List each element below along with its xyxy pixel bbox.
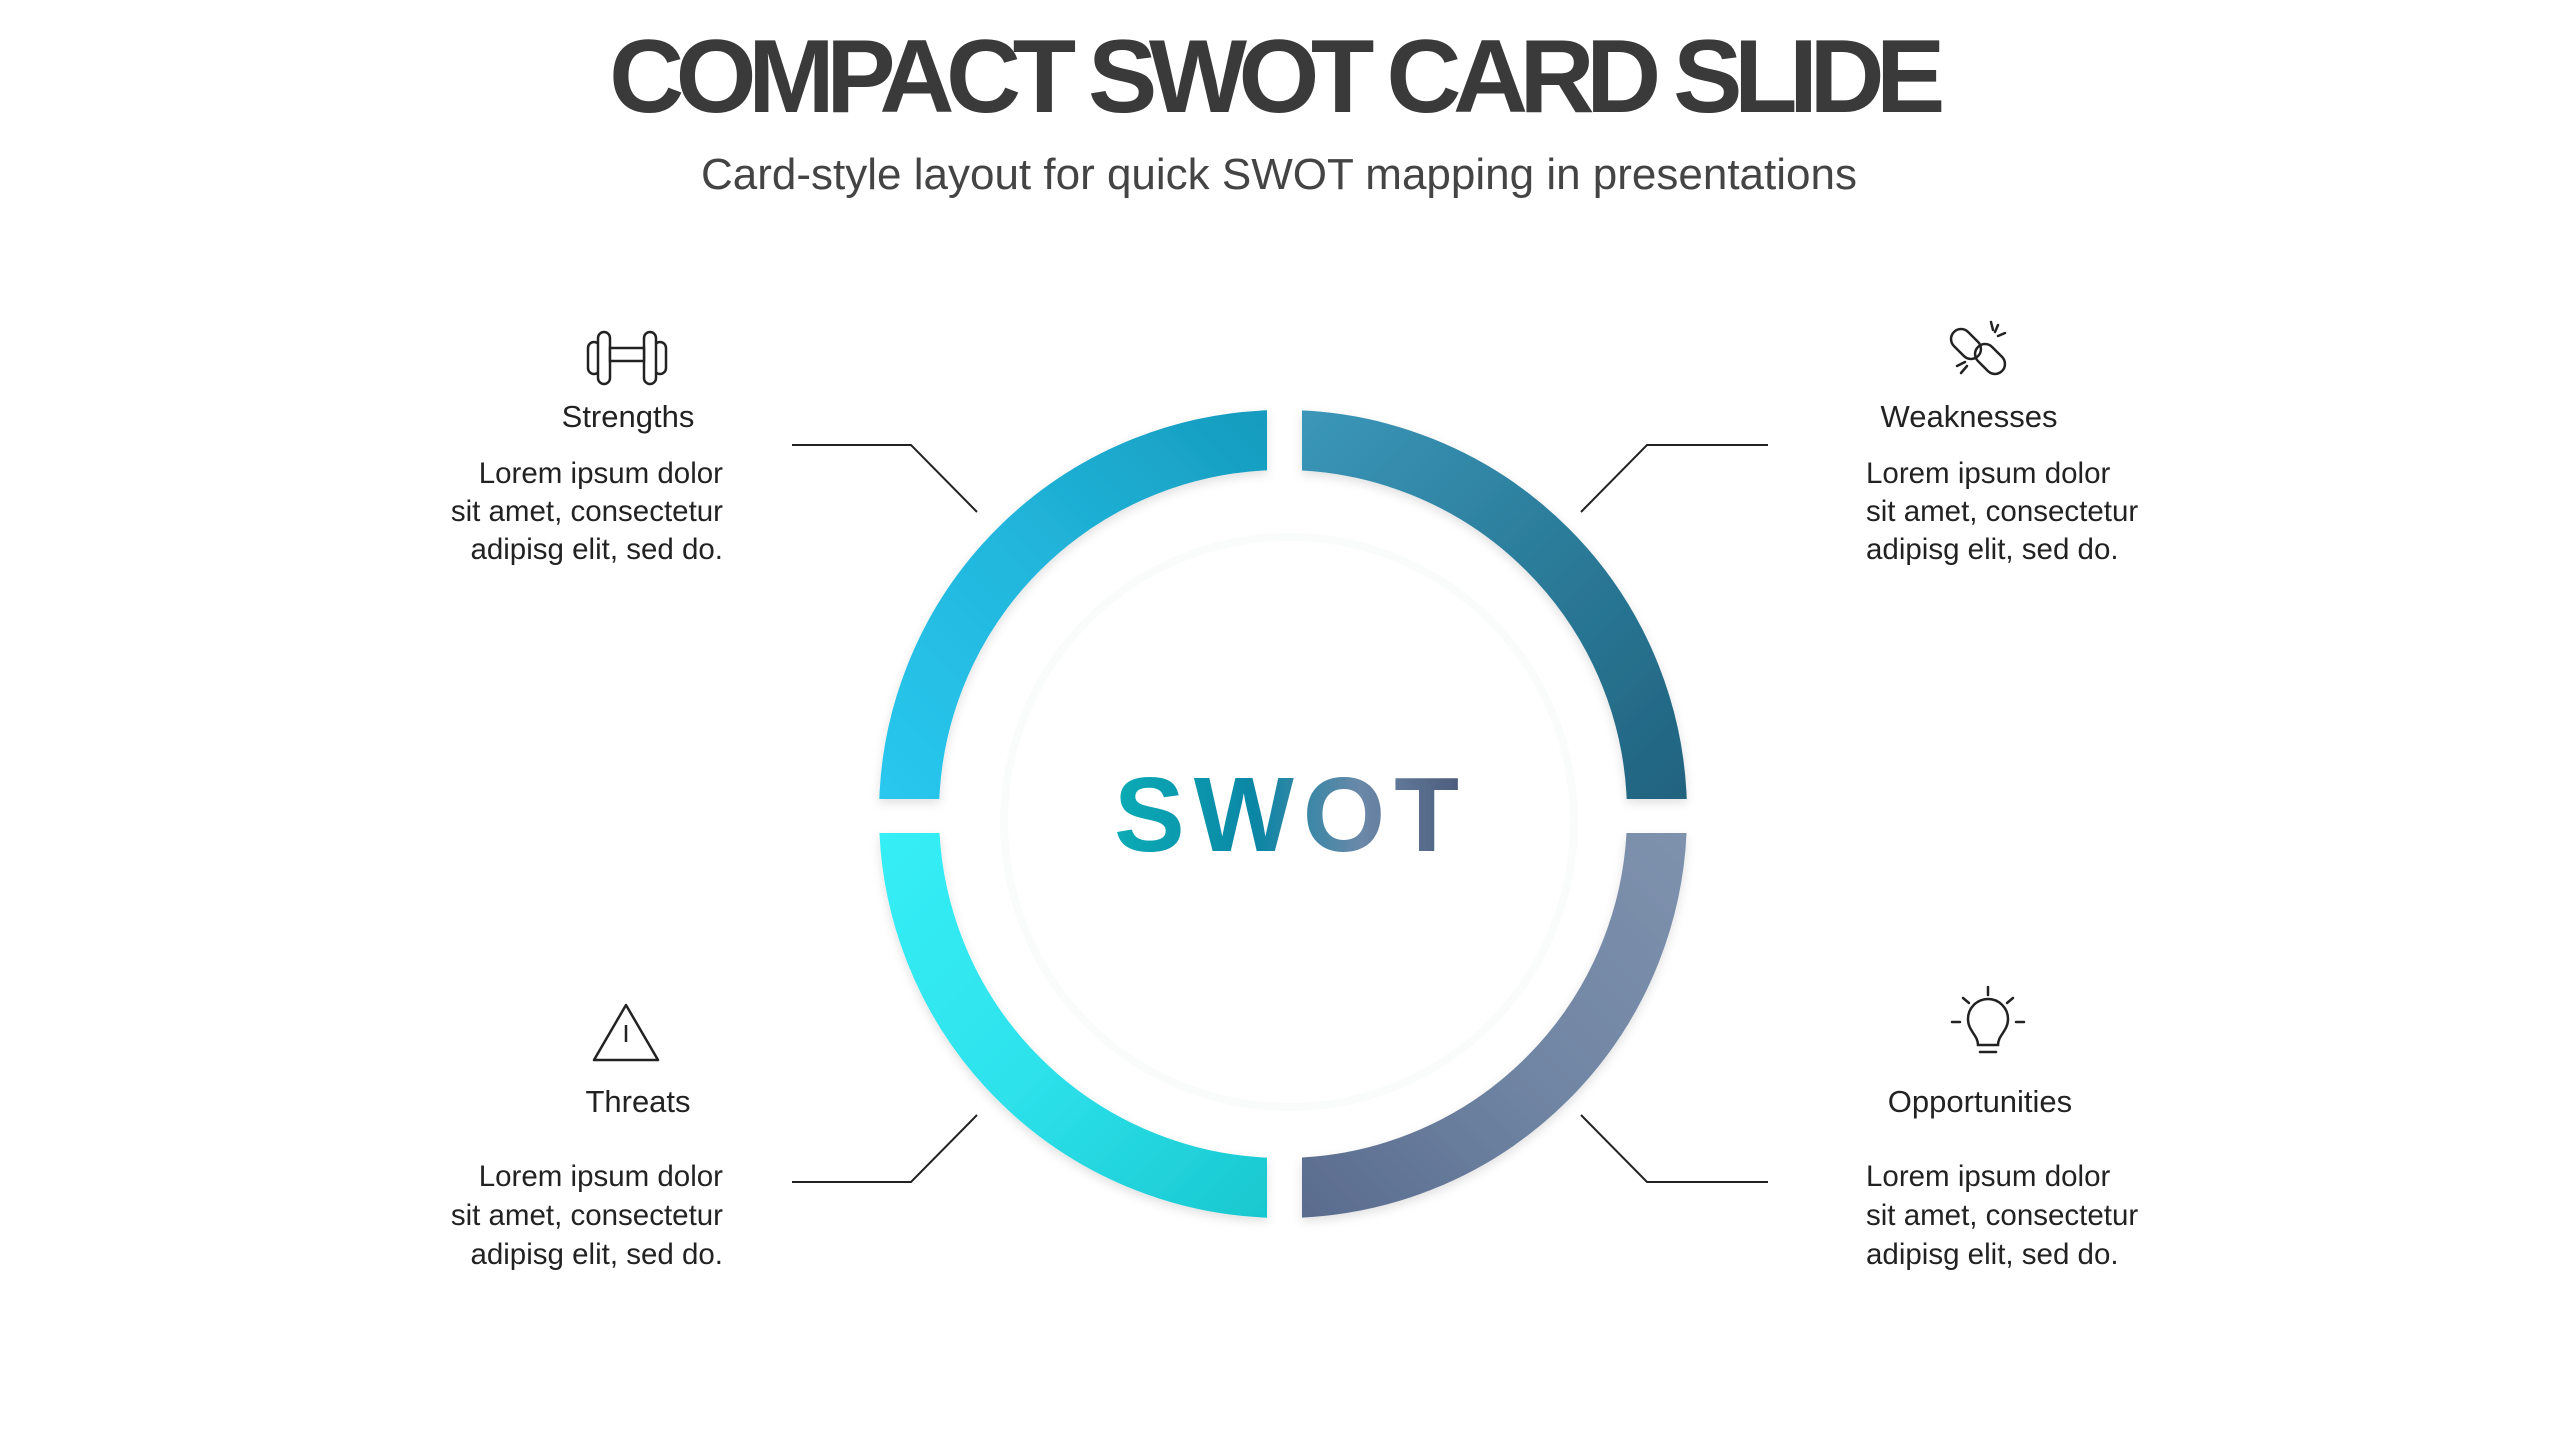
- connector: threats: [792, 1115, 977, 1182]
- heading: threats: Threats: [585, 1084, 691, 1119]
- heading: strengths: Strengths: [562, 399, 694, 434]
- body: opportunities: Lorem ipsum dolor: [1866, 1160, 2110, 1193]
- connector: opportunities: [1581, 1115, 1768, 1182]
- body: opportunities: sit amet, consectetur: [1866, 1199, 2138, 1232]
- body: threats: adipisg elit, sed do.: [470, 1238, 723, 1271]
- SWOT ring: [909, 440, 1657, 1188]
- ring segment: opportunities: [1299, 833, 1689, 1224]
- body: strengths: Lorem ipsum dolor: [479, 457, 723, 490]
- body: weaknesses: Lorem ipsum dolor: [1866, 457, 2110, 490]
- icon: dumbbell: [588, 332, 666, 384]
- heading: opportunities: Opportunities: [1888, 1084, 2072, 1119]
- connector: strengths: [792, 445, 977, 512]
- ring segment: strengths: [877, 410, 1270, 806]
- icon: warning triangle: [594, 1005, 658, 1060]
- body: opportunities: adipisg elit, sed do.: [1866, 1238, 2119, 1271]
- inner soft circle: [1004, 537, 1574, 1107]
- panel: opportunities: [1866, 987, 2138, 1271]
- center label SWOT: SWOT: [1114, 756, 1468, 874]
- body: threats: sit amet, consectetur: [451, 1199, 723, 1232]
- ring segment: weaknesses: [1299, 410, 1689, 806]
- panel: threats: [451, 1005, 723, 1271]
- body: weaknesses: adipisg elit, sed do.: [1866, 533, 2119, 566]
- ring segment: threats: [877, 833, 1270, 1224]
- connector: weaknesses: [1581, 445, 1768, 512]
- panel: weaknesses: [1866, 322, 2138, 566]
- body: strengths: adipisg elit, sed do.: [470, 533, 723, 566]
- panel: strengths: [451, 332, 723, 566]
- body: strengths: sit amet, consectetur: [451, 495, 723, 528]
- body: weaknesses: sit amet, consectetur: [1866, 495, 2138, 528]
- icon: light bulb: [1952, 987, 2024, 1052]
- title: COMPACT SWOT CARD SLIDE: [609, 19, 1942, 135]
- heading: weaknesses: Weaknesses: [1881, 399, 2057, 434]
- icon: broken link: [1947, 322, 2009, 378]
- body: threats: Lorem ipsum dolor: [479, 1160, 723, 1193]
- subtitle: Card-style layout for quick SWOT mapping in presentations: [701, 150, 1857, 199]
